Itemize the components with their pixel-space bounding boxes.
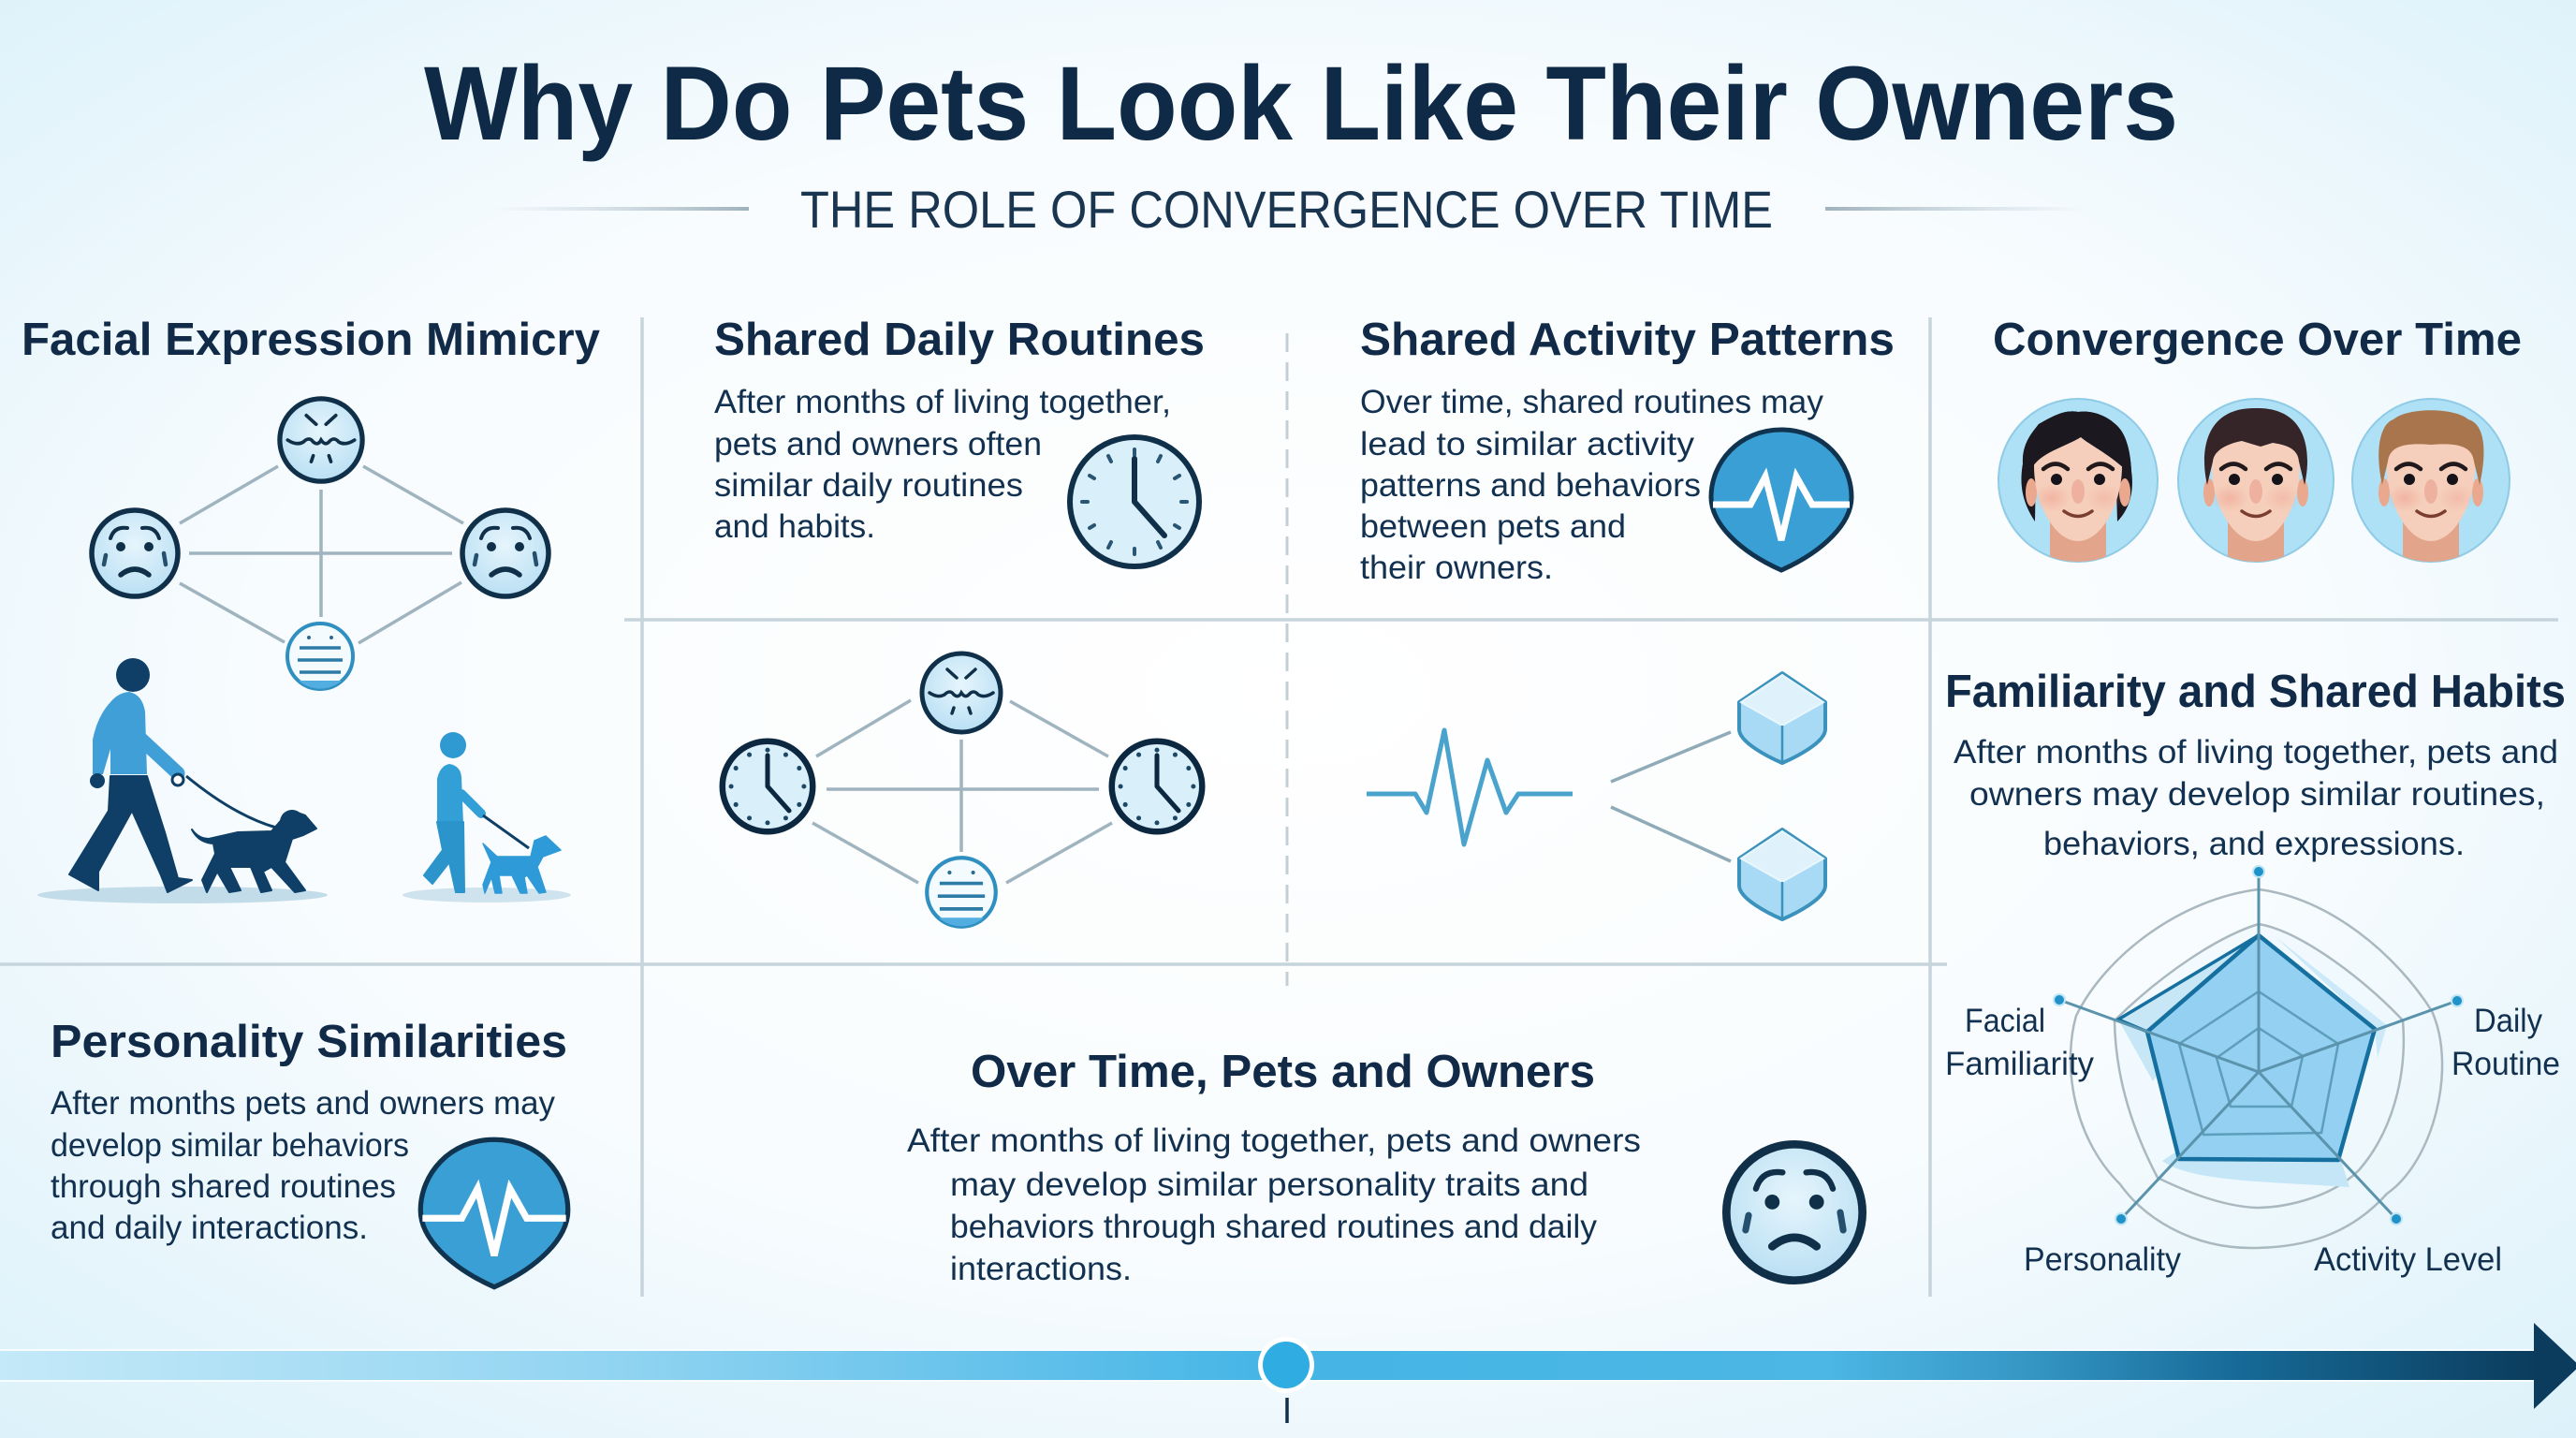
panel: over time, pets and owners — [907, 1047, 1863, 1287]
body: shared daily routines: similar daily routines — [714, 467, 1023, 504]
body: shared daily routines: and habits. — [714, 508, 875, 545]
body: personality similarities: After months pets and owners may — [51, 1085, 555, 1122]
radar labels: Routine — [2452, 1046, 2560, 1082]
panel: convergence over time — [1993, 315, 2522, 565]
title: Why Do Pets Look Like Their Owners — [424, 45, 2178, 162]
panel: personality similarities — [51, 1017, 568, 1287]
timeline arrow — [0, 1323, 2576, 1423]
body: personality similarities: through shared routines — [51, 1168, 396, 1205]
heading: familiarity and shared habits: Familiarity and Shared Habits — [1945, 667, 2566, 717]
body: over time, pets and owners: interactions. — [950, 1251, 1132, 1287]
panel: facial expression mimicry — [22, 315, 600, 903]
radar labels: Personality — [2024, 1241, 2181, 1278]
body: familiarity and shared habits: After months of living together, pets and — [1954, 734, 2558, 770]
body: shared daily routines — [714, 384, 1171, 545]
radar labels: Activity Level — [2314, 1241, 2502, 1278]
portrait: dark wavy hair — [1998, 399, 2158, 565]
diagram: pulse line with cubes — [1367, 673, 1825, 919]
body: shared daily routines: pets and owners often — [714, 426, 1042, 462]
body: shared activity patterns: patterns and behaviors — [1360, 467, 1701, 504]
panel: shared daily routines — [714, 315, 1205, 566]
icon: pulse shield — [1711, 430, 1852, 570]
icon: sad face — [1726, 1144, 1863, 1281]
body: shared activity patterns — [1360, 384, 1823, 586]
body: shared activity patterns: Over time, shared routines may — [1360, 384, 1823, 420]
heading: facial expression mimicry: Facial Expression Mimicry — [22, 315, 600, 365]
network of faces — [92, 399, 549, 689]
subtitle: THE ROLE OF CONVERGENCE OVER TIME — [800, 180, 1773, 239]
body: familiarity and shared habits — [1954, 734, 2558, 862]
icon: pulse shield — [420, 1139, 568, 1287]
illustration: child walking dog — [402, 732, 571, 902]
illustration: owner walking dog — [37, 658, 328, 903]
radar labels — [1945, 1003, 2560, 1278]
radar labels: Familiarity — [1945, 1046, 2094, 1082]
body: over time, pets and owners: may develop similar personality traits and — [950, 1167, 1588, 1203]
icon: clock — [1070, 437, 1199, 566]
body: personality similarities: develop similar behaviors — [51, 1127, 409, 1164]
radar chart — [1945, 866, 2560, 1278]
heading: shared daily routines: Shared Daily Routines — [714, 315, 1205, 365]
body: familiarity and shared habits: owners may develop similar routines, — [1969, 776, 2545, 813]
body: shared activity patterns: between pets and — [1360, 508, 1626, 545]
panel: shared activity patterns — [1360, 315, 1895, 586]
body: familiarity and shared habits: behaviors, and expressions. — [2043, 826, 2465, 862]
body: shared activity patterns: lead to similar activity — [1360, 426, 1695, 462]
body: over time, pets and owners: behaviors through shared routines and daily — [950, 1209, 1598, 1245]
body: personality similarities: and daily interactions. — [51, 1210, 368, 1246]
heading: shared activity patterns: Shared Activity Patterns — [1360, 315, 1895, 365]
body: over time, pets and owners — [907, 1123, 1641, 1287]
body: over time, pets and owners: After months of living together, pets and owners — [907, 1123, 1641, 1159]
radar labels: Daily — [2474, 1003, 2542, 1039]
body: personality similarities — [51, 1085, 555, 1246]
heading: over time, pets and owners: Over Time, Pets and Owners — [971, 1047, 1595, 1097]
body: shared activity patterns: their owners. — [1360, 550, 1553, 586]
heading: convergence over time: Convergence Over Time — [1993, 315, 2522, 365]
heading: personality similarities: Personality Similarities — [51, 1017, 567, 1067]
panel: familiarity and shared habits — [1945, 667, 2566, 1278]
radar labels: Facial — [1965, 1003, 2045, 1039]
diagram: clock network — [723, 653, 1202, 927]
portrait: short dark hair — [2178, 399, 2334, 565]
portrait: light brown hair — [2352, 399, 2510, 565]
body: shared daily routines: After months of living together, — [714, 384, 1171, 420]
